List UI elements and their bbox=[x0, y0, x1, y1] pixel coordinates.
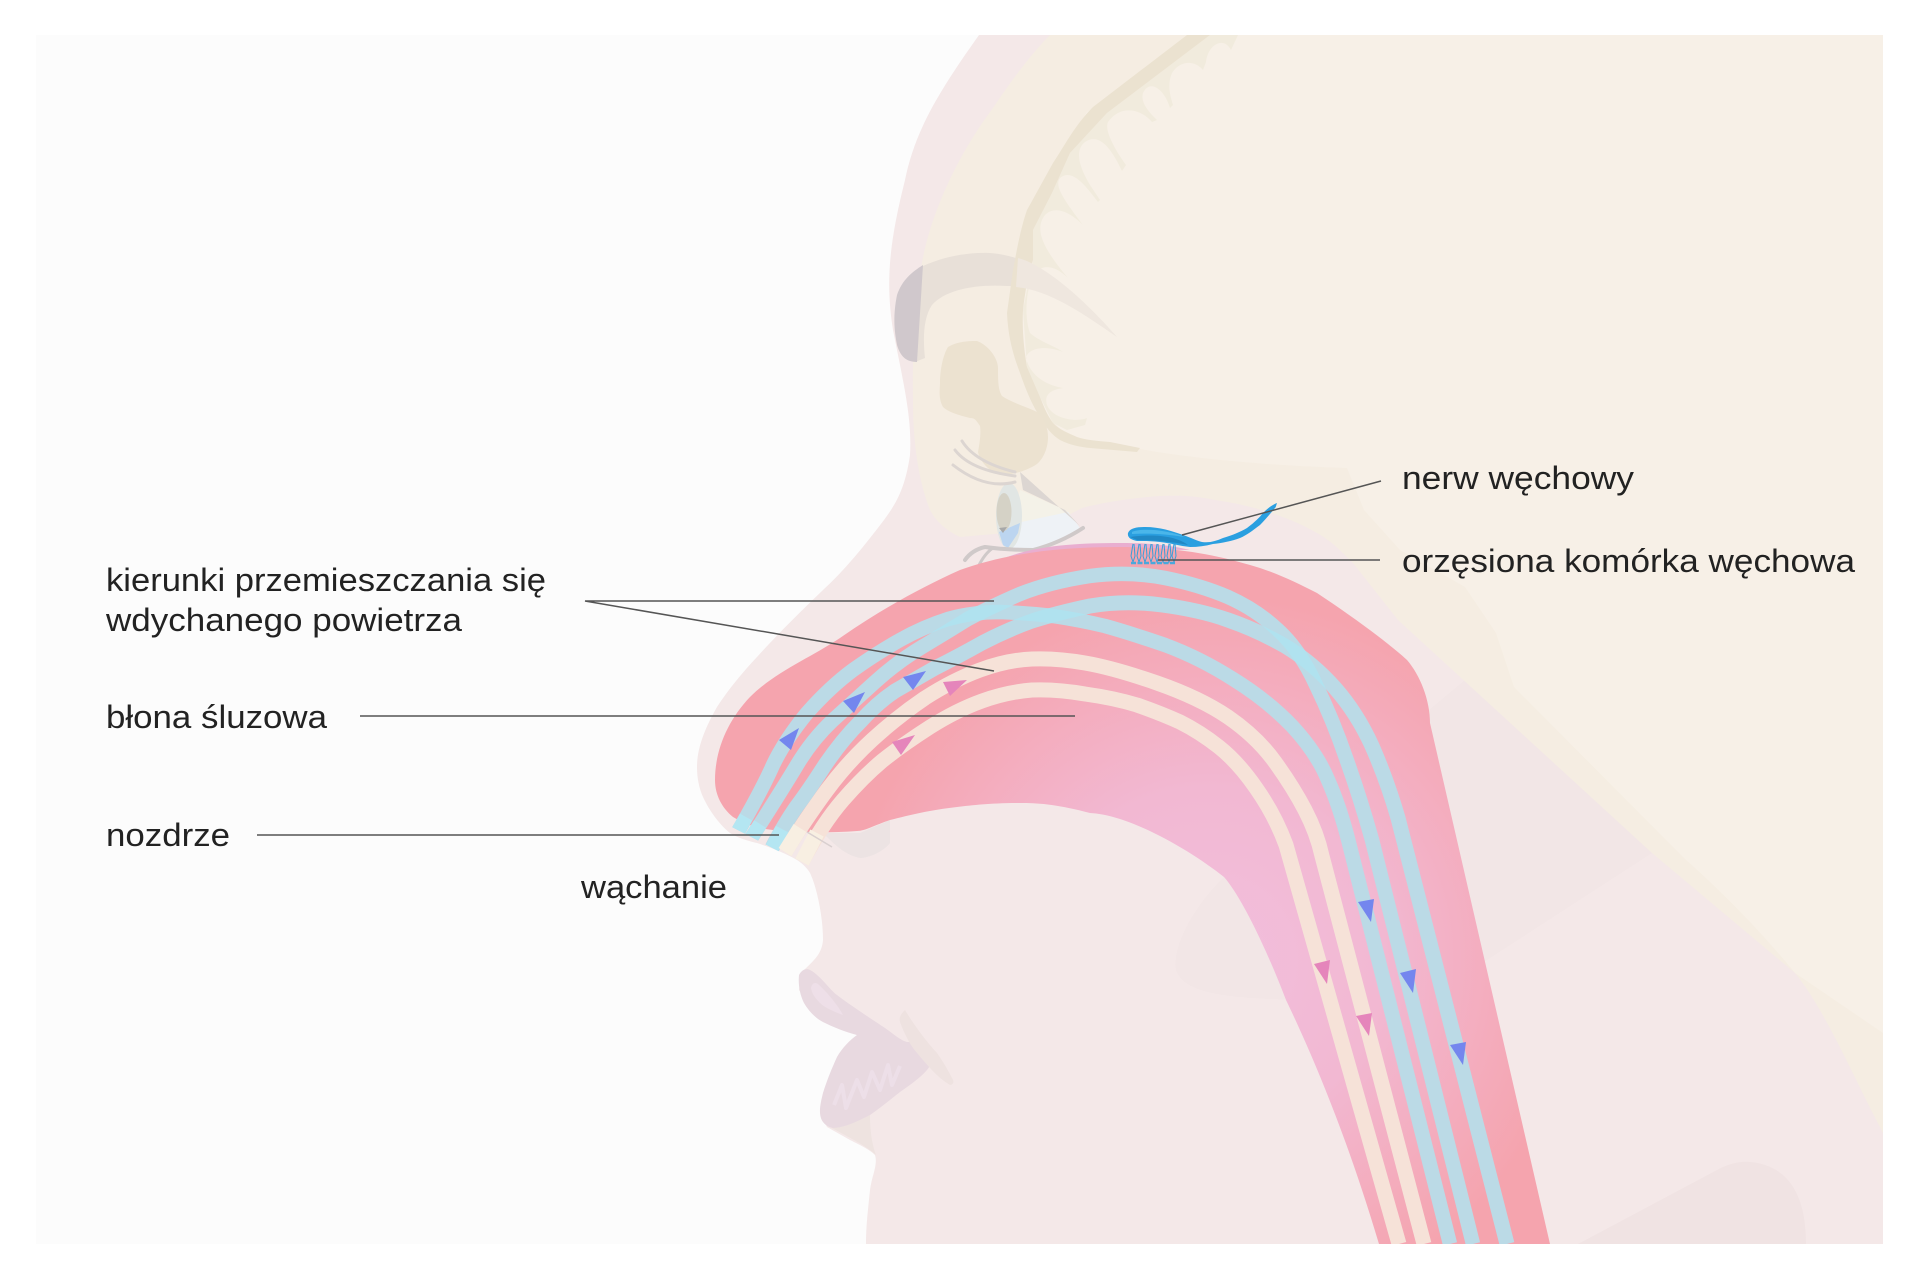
blue arrow throat 1 bbox=[1358, 899, 1374, 922]
blue band three bbox=[772, 603, 1507, 1244]
mouth crease bbox=[910, 1042, 933, 1066]
blue band one bbox=[736, 612, 1450, 1244]
crossing highlight of band two bbox=[1264, 626, 1326, 688]
blue band two bbox=[750, 574, 1473, 1244]
eye sclera lower bbox=[1013, 512, 1080, 548]
iris bbox=[996, 493, 1012, 531]
brain folds bbox=[1023, 35, 1238, 430]
mucosa top lilac edge bbox=[1007, 543, 1190, 557]
label: nostril: nozdrze bbox=[106, 817, 230, 853]
pink arrow throat 2 bbox=[1356, 1013, 1372, 1036]
olfactory cilia bbox=[1131, 544, 1176, 563]
cranium area bbox=[913, 35, 1883, 1133]
cream band upper bbox=[785, 659, 1424, 1244]
leader lines bbox=[257, 481, 1381, 835]
leader: mucous membrane bbox=[360, 715, 1075, 717]
nostril band ends blue bbox=[736, 817, 782, 848]
head illustration bbox=[697, 35, 1883, 1244]
eye blue lower part bbox=[999, 523, 1020, 548]
label: olfactory nerve: nerw węchowy bbox=[1402, 460, 1634, 496]
lip highlight lower bbox=[834, 1065, 900, 1108]
head silhouette bbox=[697, 35, 1883, 1244]
blue arrow throat 2 bbox=[1400, 969, 1416, 993]
throat shadow bbox=[1175, 680, 1652, 1000]
pink arrow throat 1 bbox=[1314, 960, 1330, 984]
pink arrow nose 1 bbox=[943, 680, 967, 696]
leader: nostril bbox=[257, 834, 779, 836]
blue arrow nose 1 bbox=[779, 728, 799, 750]
blue arrow nose 2 bbox=[843, 692, 865, 713]
eye sclera upper bbox=[1012, 490, 1068, 524]
label: air direction bbox=[105, 562, 546, 638]
blue arrow nose 3 bbox=[903, 671, 926, 690]
nerve highlight bbox=[1132, 530, 1185, 537]
mucous membrane bbox=[715, 547, 1550, 1244]
label: mucous membrane: błona śluzowa bbox=[106, 699, 327, 735]
cilia base bbox=[1131, 562, 1176, 564]
leader: ciliated cell bbox=[1158, 559, 1380, 561]
crossing highlight of band one bbox=[930, 605, 1084, 634]
label: sniffing: wąchanie bbox=[580, 869, 727, 905]
leader: air direction bbox=[585, 601, 994, 671]
nostril rim shadow bbox=[807, 832, 832, 847]
nerve body bbox=[1128, 503, 1277, 547]
nasal wing crease bbox=[823, 820, 890, 858]
brain area bbox=[1008, 35, 1883, 1033]
direction arrows bbox=[779, 671, 1466, 1065]
nostril band ends cream bbox=[785, 828, 817, 862]
frontal sinus bbox=[940, 341, 1048, 475]
airflow bands bbox=[736, 574, 1507, 1244]
jaw shadow bbox=[1578, 1162, 1806, 1244]
pink arrow nose 2 bbox=[892, 735, 915, 755]
lip highlight upper bbox=[811, 983, 843, 1015]
blue arrow throat 3 bbox=[1450, 1042, 1466, 1065]
eyeball bbox=[996, 483, 1022, 549]
label: air direction: wdychanego powietrza bbox=[105, 602, 462, 638]
pupil bbox=[999, 527, 1007, 533]
skull bone band bbox=[1007, 35, 1210, 452]
label: ciliated olfactory cell: orzęsiona komórka węchowa bbox=[1402, 543, 1855, 579]
leader: olfactory nerve bbox=[1182, 481, 1381, 535]
nerve shadow bbox=[1130, 536, 1188, 545]
olfactory nerve bbox=[1128, 503, 1277, 547]
chin shadow bbox=[837, 1117, 866, 1128]
eye bbox=[996, 483, 1080, 550]
eyebrow right part bbox=[1016, 258, 1117, 337]
eyebrow dark part bbox=[894, 265, 923, 362]
upper lip and lower lip bbox=[799, 969, 933, 1128]
label: air direction: kierunki przemieszczania się bbox=[106, 562, 546, 598]
eyelashes and eyelid bbox=[953, 441, 1083, 567]
eyebrow left part bbox=[917, 253, 1015, 361]
cream band lower bbox=[802, 690, 1399, 1244]
